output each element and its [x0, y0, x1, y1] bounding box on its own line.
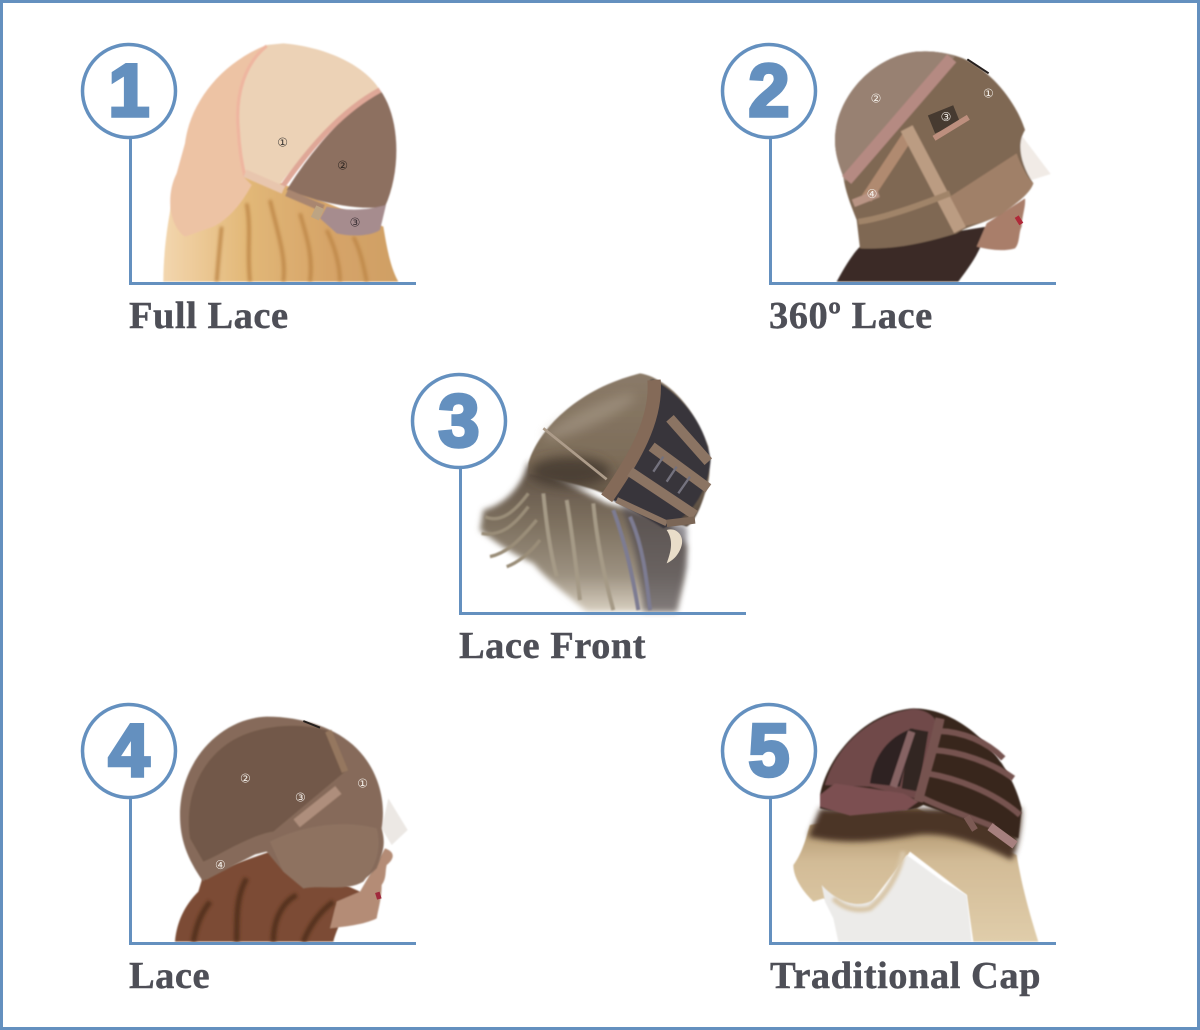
- number badge 3: 3: [438, 379, 480, 462]
- illustration: full lace wig cap: [163, 43, 398, 282]
- panel: 360 Lace: [722, 44, 1056, 337]
- label: Lace: [129, 955, 210, 997]
- axis lines: [130, 138, 416, 284]
- illustration: traditional wig cap: [793, 708, 1038, 942]
- number badge 1: 1: [108, 49, 150, 132]
- panel: Full Lace: [82, 43, 416, 337]
- illustration: lace wig cap: ④: [215, 858, 226, 872]
- label: Lace Front: [459, 625, 646, 667]
- illustration: lace wig cap: [175, 717, 408, 942]
- number badge 4: [82, 704, 176, 798]
- illustration: 360 lace wig cap: ④: [867, 187, 877, 201]
- number badge 3: [412, 374, 506, 468]
- number badge 5: 5: [748, 709, 790, 792]
- illustration: full lace wig cap: ①: [277, 135, 288, 149]
- label: 360º Lace: [769, 295, 933, 337]
- number badge 5: [722, 704, 816, 798]
- illustration: full lace wig cap: ③: [350, 215, 360, 229]
- panel: Traditional Cap: [722, 704, 1056, 997]
- axis lines: [130, 798, 416, 944]
- illustration: lace front wig cap: [480, 373, 711, 612]
- axis lines: [460, 468, 746, 614]
- axis lines: [770, 798, 1056, 944]
- illustration: 360 lace wig cap: ②: [871, 92, 881, 106]
- number badge 2: 2: [748, 49, 790, 132]
- illustration: full lace wig cap: ②: [337, 159, 348, 173]
- illustration: lace wig cap: ③: [295, 790, 306, 804]
- number badge 4: 4: [108, 709, 150, 792]
- illustration: 360 lace wig cap: ③: [941, 110, 951, 124]
- number badge 2: [722, 44, 816, 138]
- panel: Lace: [82, 704, 416, 997]
- illustration: lace wig cap: ①: [357, 776, 368, 790]
- panel: Lace Front: [412, 373, 746, 667]
- axis lines: [770, 138, 1056, 284]
- label: Traditional Cap: [770, 955, 1041, 997]
- illustration: 360 lace wig cap: ①: [983, 87, 994, 101]
- illustration: 360 lace wig cap: [835, 51, 1051, 282]
- number badge 1: [82, 44, 176, 138]
- label: Full Lace: [129, 295, 289, 337]
- illustration: lace wig cap: ②: [240, 771, 251, 785]
